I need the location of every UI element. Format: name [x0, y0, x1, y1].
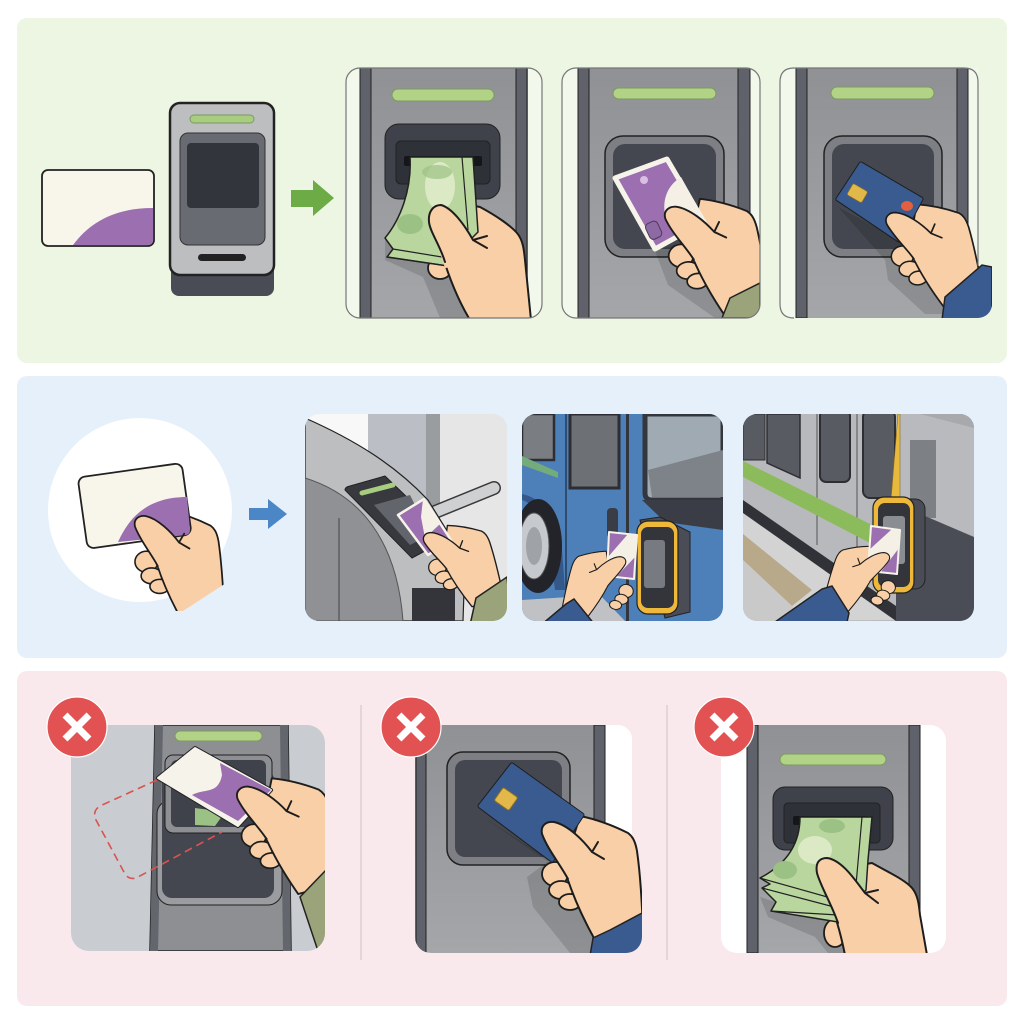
thumb: [542, 822, 604, 882]
thumb: [429, 205, 490, 268]
transit card: [158, 748, 271, 826]
scene: card held too far: [71, 725, 344, 955]
hand: [542, 816, 643, 940]
thumb: [236, 786, 300, 842]
sleeve: [775, 586, 849, 622]
hand: [440, 205, 531, 320]
sleeve: [544, 598, 593, 621]
panel: accepted payment methods: [17, 18, 1007, 363]
thumb: [885, 212, 943, 261]
bank card: [838, 164, 921, 240]
sleeve: [942, 265, 992, 320]
icon: red cross badge: [694, 697, 754, 757]
scene: cash rejected: [721, 725, 946, 955]
banknotes: [385, 157, 478, 266]
icon: card reader: [170, 103, 274, 296]
thumb: [664, 202, 728, 264]
hand: [890, 204, 979, 308]
scene: paying with transit card: [562, 68, 770, 319]
scene: station gate: [305, 414, 512, 625]
dashed outline: [95, 780, 222, 878]
thumb: [817, 858, 880, 925]
fare card: [42, 170, 154, 246]
hand holding card: [48, 418, 232, 611]
transit card: [398, 499, 451, 555]
hand: [668, 198, 760, 314]
transit card: [868, 526, 900, 574]
hand: [428, 524, 501, 608]
panel: not accepted: [17, 671, 1007, 1006]
scene: paying with bank card: [780, 68, 992, 320]
thumb: [422, 532, 470, 571]
hand: [240, 778, 325, 895]
icon: red cross badge: [47, 697, 107, 757]
arrow: [249, 499, 287, 529]
sleeve: [299, 870, 325, 948]
transit card: [615, 159, 706, 249]
scene: train: [743, 410, 974, 622]
hand: [826, 546, 896, 612]
sleeve: [590, 912, 644, 956]
thumb: [852, 552, 890, 583]
hand: [828, 863, 927, 955]
thumb: [588, 556, 626, 588]
icon: red cross badge: [381, 697, 441, 757]
scene: bank card rejected: [415, 725, 644, 956]
panel: tap to ride: [17, 376, 1007, 658]
sleeve: [470, 576, 507, 621]
sleeve: [722, 283, 760, 318]
arrow: [291, 180, 334, 216]
transit card: [607, 532, 637, 579]
scene: bus: [514, 414, 723, 625]
banknotes: [760, 817, 872, 922]
scene: paying with cash: [346, 68, 542, 320]
bank card: [480, 765, 582, 860]
hand: [562, 550, 634, 616]
